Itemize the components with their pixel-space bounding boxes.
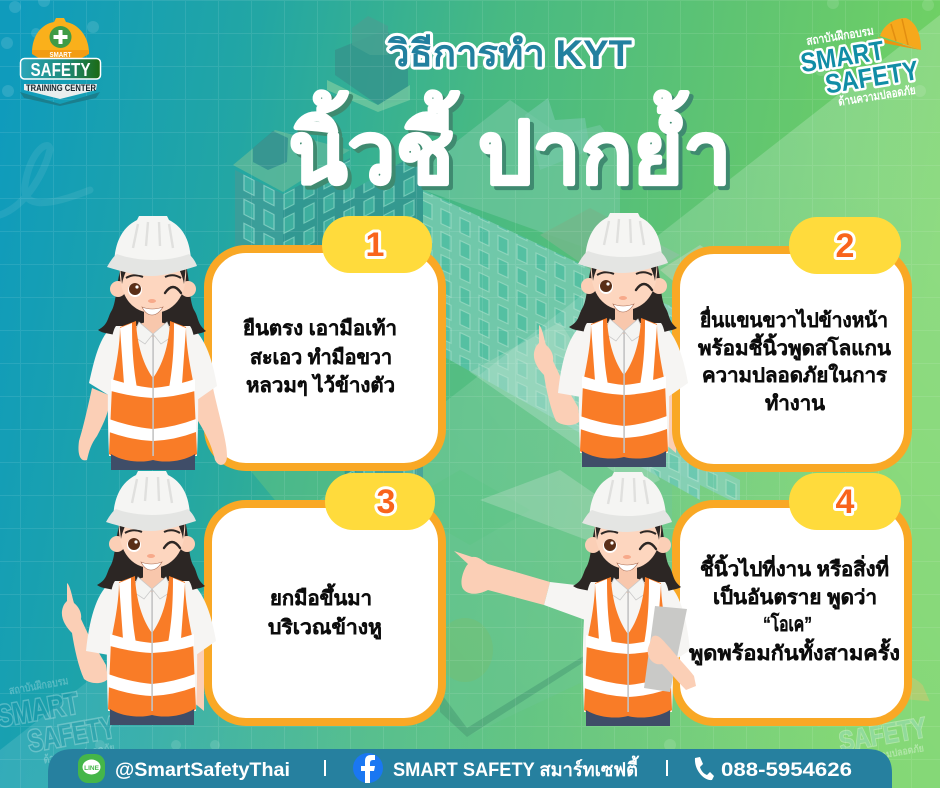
badge: number 1 [322, 216, 432, 273]
watermark: bottom left logo: SAFETY [25, 711, 118, 759]
logo: Smart Safety institute [796, 18, 922, 114]
text: step 2: ทำงาน [765, 393, 825, 415]
badge: number 4: 4 [836, 483, 855, 521]
logo: Smart Safety Training Center: SMART [50, 50, 72, 59]
logo: Smart Safety Training Center [20, 18, 100, 106]
text: step 2: ยื่นแขนขวาไปข้างหน้า [700, 305, 888, 332]
watermark: bottom left logo [0, 668, 120, 773]
icon: Facebook [353, 753, 383, 783]
badge: number 1: 1 [366, 226, 384, 264]
figure: worker standing straight [78, 216, 227, 470]
icon: phone [695, 757, 714, 780]
badge: number 3: 3 [377, 483, 395, 521]
text: step 1 [243, 317, 397, 397]
divider: separator 2 [666, 760, 668, 776]
text: step 1: ยืนตรง เอามือเท้า [243, 317, 397, 340]
text: step 4: พูดพร้อมกันทั้งสามครั้ง [689, 638, 900, 667]
text: step 4: เป็นอันตราย พูดว่า [713, 584, 877, 611]
icon: clipboard [644, 606, 687, 692]
watermark: bottom left logo: สถาบันฝึกอบรม [8, 674, 69, 697]
text: step 3: บริเวณข้างหู [268, 616, 382, 641]
panel: step 4 card [676, 473, 908, 722]
watermark: bottom right logo [807, 672, 939, 772]
badge: number 4 [789, 473, 901, 530]
text: step 3: ยกมือขึ้นมา [270, 583, 372, 610]
logo: Smart Safety institute: ด้านความปลอดภัย [837, 83, 916, 109]
watermark: bottom right logo: SMART [809, 688, 889, 732]
background: squiggle [0, 145, 90, 215]
text: phone number: 088-5954626 [721, 760, 852, 781]
footer: contact bar [48, 749, 892, 788]
text: step 2: พร้อมชี้นิ้วพูดสโลแกน [698, 333, 891, 362]
figure: worker raising finger, step 3 (arm behind card) [62, 579, 204, 711]
badge: number 3 [325, 473, 435, 530]
text: step 1: หลวมๆ ไว้ข้างตัว [246, 373, 395, 397]
figure: worker body, step 2 [569, 213, 688, 467]
panel: step 3 card [208, 473, 442, 722]
panel: step 1 card [208, 216, 442, 467]
text: step 2: ความปลอดภัยในการ [702, 363, 887, 387]
text: step 1: สะเอว ทำมือขวา [250, 346, 392, 369]
text: step 2 [698, 305, 891, 415]
icon: LINE: LINE [84, 765, 100, 772]
logo: Smart Safety Training Center: SAFETY [30, 60, 90, 80]
text: Facebook page: SMART SAFETY สมาร์ทเซฟตี้ [393, 755, 640, 781]
heading: method title: วิธีการทำ KYT [387, 33, 632, 74]
watermark: bottom left logo: ด้านความปลอดภัย [42, 741, 116, 766]
text: step 4: “โอเค” [763, 612, 812, 636]
figure: worker raising finger, step 2 (arm behind card) [534, 321, 676, 453]
text: step 3 [268, 583, 382, 641]
icon: LINE [78, 754, 105, 783]
text: step 4: ชี้นิ้วไปที่งาน หรือสิ่งที่ [700, 554, 889, 581]
heading: main title: นิ้วชี้ ปากย้ำ [289, 90, 731, 202]
text: LINE handle: @SmartSafetyThai [115, 760, 290, 781]
logo: Smart Safety institute: สถาบันฝึกอบรม [805, 24, 875, 48]
heading: main title: นิ้วชี้ ปากย้ำ [293, 94, 735, 206]
logo: Smart Safety Training Center: TRAINING CENTER [26, 83, 96, 93]
figure: worker body, step 3 [97, 471, 216, 725]
icon: orange hard hat [877, 18, 921, 50]
figure: worker pointing with clipboard [454, 472, 696, 726]
divider: separator 1 [324, 760, 326, 776]
text: step 4 [689, 554, 900, 667]
badge: number 2: 2 [836, 227, 854, 265]
badge: number 2 [789, 217, 901, 274]
background: isometric buildings [225, 16, 770, 737]
watermark: bottom right logo: ด้านความปลอดภัย [854, 742, 925, 766]
panel: step 2 card [676, 217, 908, 468]
logo: Smart Safety institute: SAFETY [823, 55, 921, 100]
logo: Smart Safety institute: SMART [798, 35, 887, 78]
